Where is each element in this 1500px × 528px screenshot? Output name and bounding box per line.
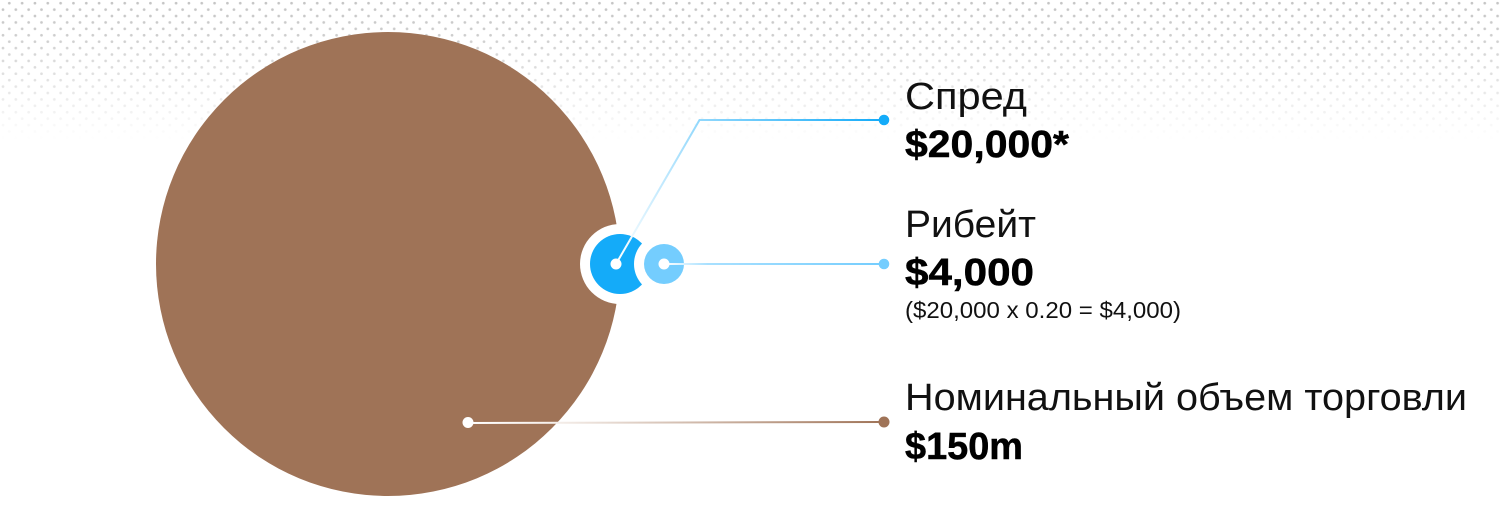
label: rebate: ($20,000 x 0.20 = $4,000) — [905, 297, 1181, 323]
big circle: notional trading volume — [156, 32, 620, 496]
label: spread: Спред — [905, 76, 1027, 118]
label: rebate: $4,000 — [905, 252, 1034, 294]
label: rebate — [905, 204, 1181, 323]
connector: notional volume — [462, 416, 890, 428]
label: notional volume: $150m — [905, 426, 1023, 468]
label: spread: $20,000* — [905, 124, 1069, 166]
label: rebate: Рибейт — [905, 204, 1036, 246]
spread circle — [590, 234, 650, 294]
connector: spread — [610, 115, 889, 270]
label: spread — [905, 76, 1069, 166]
rebate circle — [644, 244, 684, 284]
white ring around spread circle — [580, 224, 660, 304]
white ring around rebate circle — [634, 234, 694, 294]
label: notional volume: Номинальный объем торговли — [905, 377, 1467, 419]
connector: rebate — [658, 258, 889, 270]
label: notional volume — [905, 377, 1467, 468]
dotted background — [2, 2, 1499, 120]
